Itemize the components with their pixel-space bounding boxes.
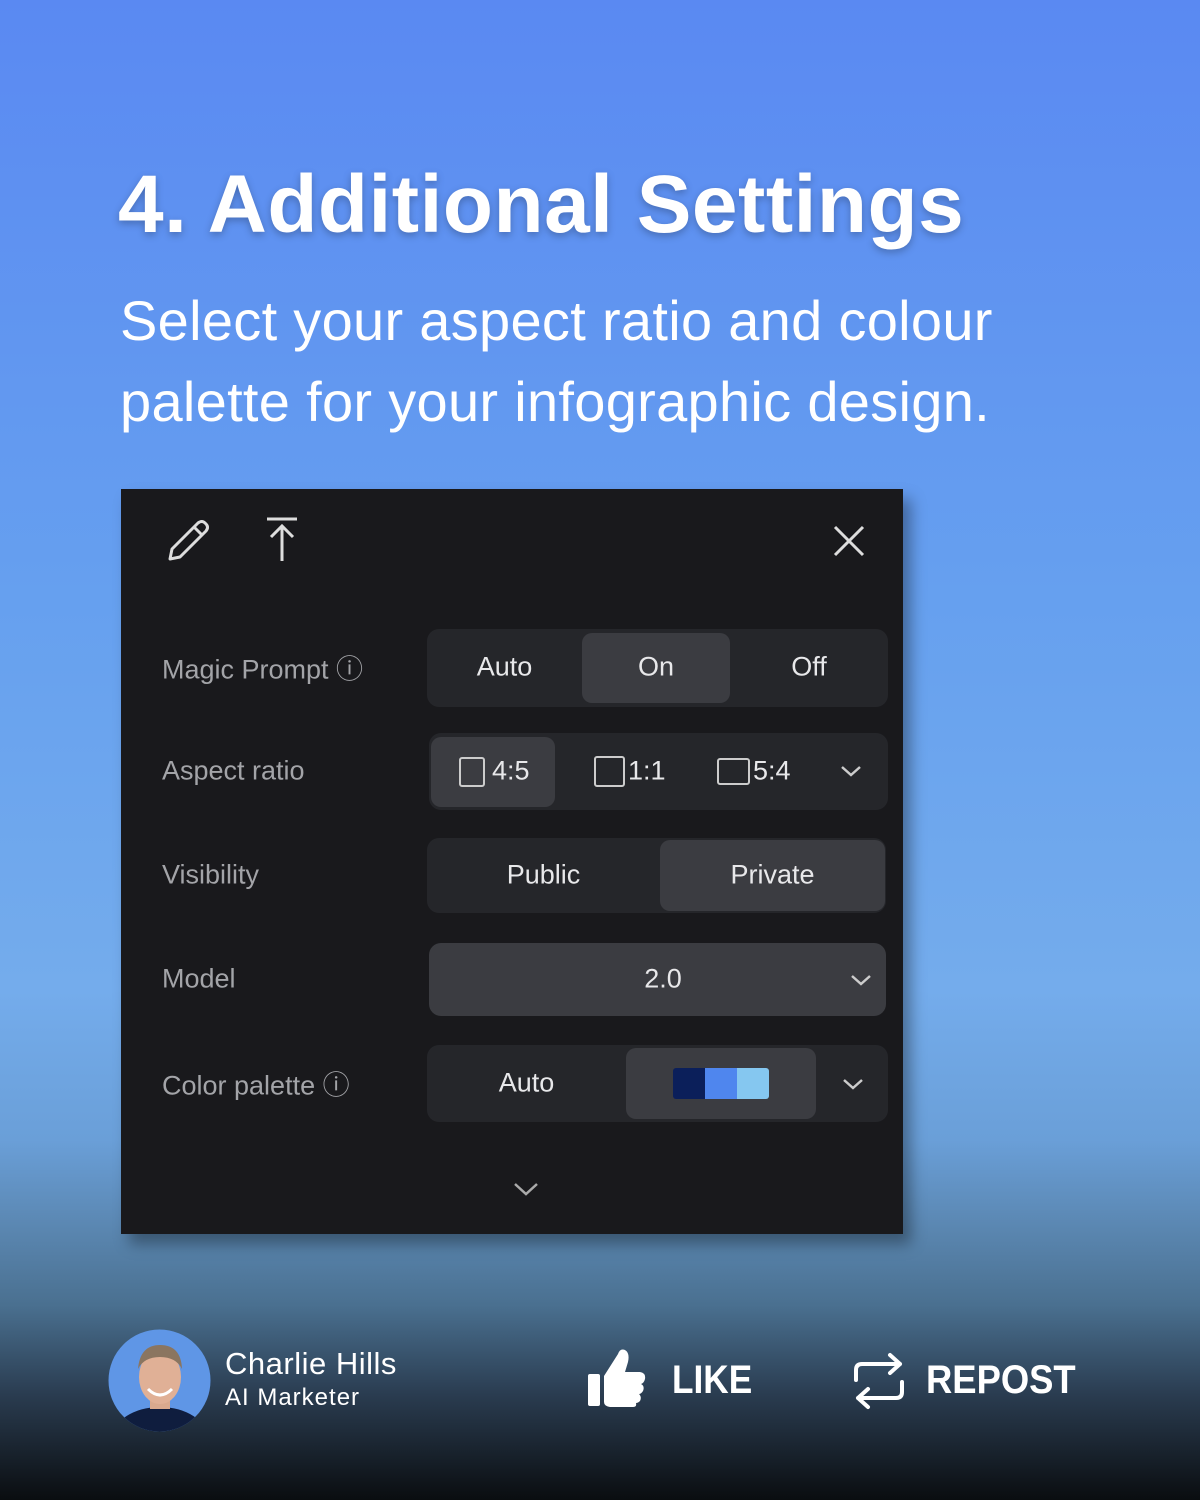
row: magic prompt: Magic Prompt ⓘ <box>162 654 363 684</box>
row: magic prompt: Off <box>791 652 827 682</box>
author role: AI Marketer <box>225 1384 360 1411</box>
row: visibility: Visibility <box>162 860 259 890</box>
icon: upload <box>267 518 297 561</box>
subtitle: Select your aspect ratio and colour <box>120 289 993 352</box>
title: 4. Additional Settings <box>118 159 964 250</box>
repost label: REPOST <box>926 1358 1076 1402</box>
row: aspect ratio: Aspect ratio <box>162 756 305 786</box>
palette swatches <box>673 1068 769 1099</box>
row: color palette: Auto <box>499 1068 554 1098</box>
like label: LIKE <box>672 1358 752 1402</box>
icon: thumbs up <box>588 1350 646 1407</box>
icon: pencil <box>168 520 209 560</box>
icon: repost <box>854 1352 904 1410</box>
row: aspect ratio: 4:5 <box>492 756 530 786</box>
row: color palette: Color palette ⓘ <box>162 1070 350 1100</box>
row: aspect ratio: 5:4 <box>753 756 791 786</box>
subtitle: palette for your infographic design. <box>120 370 990 433</box>
row: visibility: Private <box>730 860 815 890</box>
row: magic prompt: Auto <box>477 652 532 682</box>
panel: settings <box>121 489 903 1234</box>
icon: expand chevron <box>514 1183 538 1196</box>
row: magic prompt: On <box>638 652 674 682</box>
author name: Charlie Hills <box>225 1346 397 1381</box>
subtitle <box>120 289 993 433</box>
avatar <box>108 1330 210 1432</box>
icon: close <box>834 526 864 556</box>
row: visibility: Public <box>507 860 580 890</box>
row: aspect ratio: 1:1 <box>628 756 666 786</box>
row: model: Model <box>162 964 236 994</box>
row: model: 2.0 <box>644 964 682 994</box>
